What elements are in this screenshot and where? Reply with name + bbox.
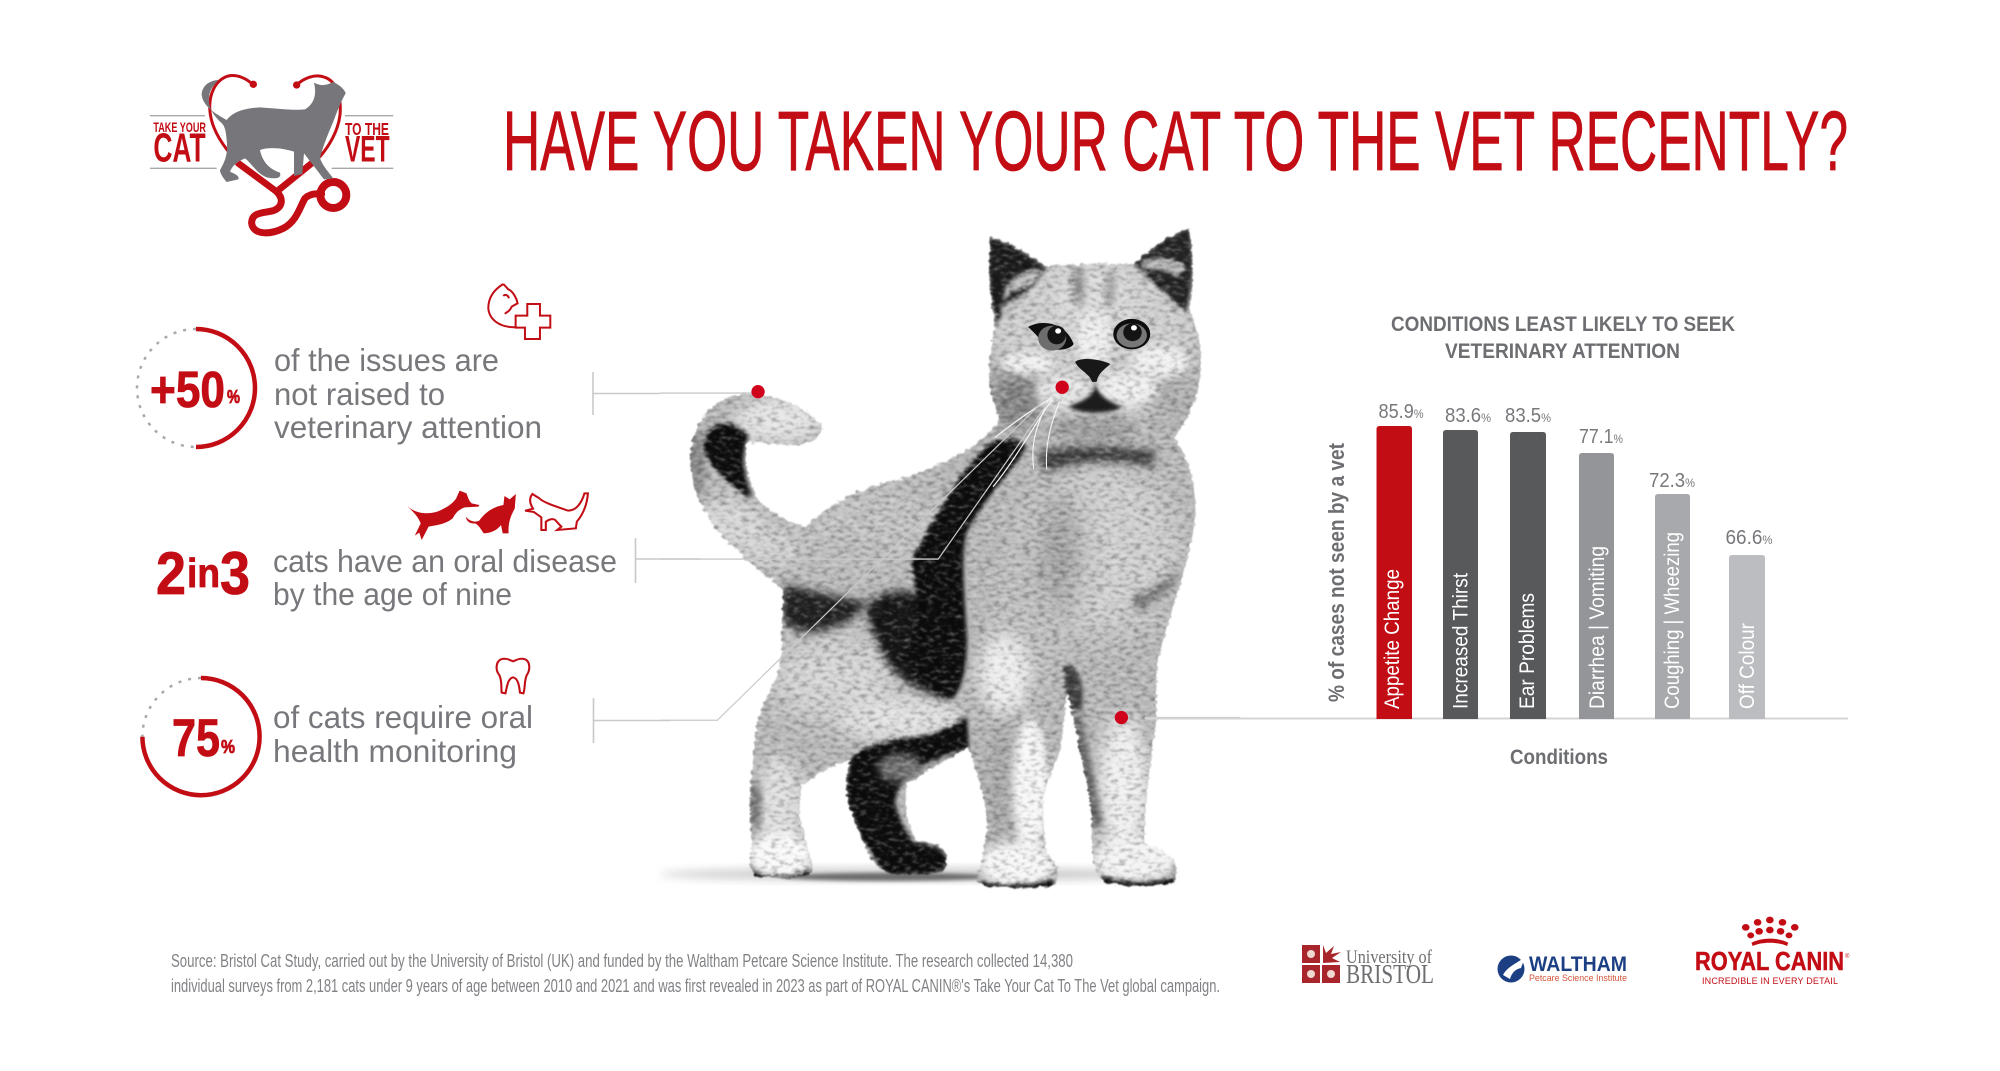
- text: oral disease: by the age of nine: [273, 576, 512, 612]
- head shading: [991, 255, 1196, 442]
- Bristol wordmark: University of: [1346, 947, 1433, 968]
- number 2 in 3: 3: [220, 540, 250, 607]
- number +50%: %: [227, 387, 240, 407]
- eyes: [1028, 319, 1150, 351]
- bar values: 83.6%: [1445, 405, 1491, 427]
- logo wordmark right: [345, 119, 390, 170]
- cat photo: [660, 210, 1240, 910]
- bar values: 83.5%: [1505, 405, 1551, 427]
- source note: Source: Bristol Cat Study, carried out by the University of Bristol (UK) and funded by the Waltham Petcare Science Institute. The research collected 14,380: [171, 950, 1073, 971]
- logo wordmark right: VET: [345, 128, 390, 170]
- Royal Canin wordmark: ROYAL CANIN: [1695, 946, 1844, 976]
- source note: [171, 950, 1220, 996]
- whiskers: [993, 397, 1060, 487]
- Royal Canin wordmark: ®: [1845, 953, 1850, 960]
- baseline: [1145, 718, 1848, 720]
- tail shading: [685, 397, 823, 567]
- bar labels: Coughing | Wheezing: [1661, 532, 1684, 709]
- connector tick: [593, 372, 660, 415]
- source note: individual surveys from 2,181 cats under 9 years of age between 2010 and 2021 and was first revealed in 2023 as part of ROYAL CANIN®'s Take Your Cat To The Vet global campaign.: [171, 975, 1220, 996]
- ears: [989, 228, 1192, 322]
- bar labels: Increased Thirst: [1450, 573, 1472, 709]
- stat: 2 in 3: [156, 491, 700, 612]
- Waltham wordmark: WALTHAM: [1529, 953, 1627, 976]
- number +50%: +50: [150, 361, 225, 418]
- ground shadow: [660, 868, 1178, 881]
- back and haunch: [771, 491, 963, 740]
- connector tick: [594, 698, 670, 743]
- dark far hind leg: [846, 717, 969, 875]
- cat body: [689, 228, 1202, 890]
- dark saddle: [904, 439, 1026, 699]
- Bristol crest: [1302, 945, 1341, 983]
- logo wordmark left: TAKE YOUR: [153, 119, 206, 135]
- icon: tooth: [497, 659, 529, 693]
- legs: [749, 665, 1174, 886]
- Waltham wordmark: Petcare Science Institute: [1529, 973, 1627, 984]
- bar values: 72.3%: [1649, 470, 1695, 492]
- number 75%: 75: [172, 709, 220, 768]
- connector tick: [636, 538, 700, 583]
- progress ring 75%: [142, 678, 260, 795]
- bars: [1376, 426, 1765, 719]
- Royal Canin wordmark: [1695, 946, 1850, 986]
- logo wordmark right: TO THE: [345, 119, 389, 139]
- icon: cat head and plus: [488, 284, 550, 339]
- bar labels: Appetite Change: [1381, 569, 1404, 709]
- bar values: 66.6%: [1726, 527, 1773, 549]
- progress ring 50%: [137, 329, 255, 447]
- bar values: 85.9%: [1378, 401, 1424, 423]
- logo cat silhouette: [202, 80, 346, 182]
- text: issues: not raised to: [274, 376, 445, 412]
- Waltham icon: [1498, 956, 1525, 982]
- Royal Canin crown: [1742, 917, 1799, 946]
- logo: Waltham: [1498, 953, 1627, 984]
- bar labels: Diarrhea | Vomiting: [1586, 546, 1609, 709]
- Bristol wordmark: [1346, 947, 1434, 989]
- logo wordmark left: CAT: [153, 125, 206, 171]
- number 2 in 3: [156, 540, 250, 607]
- bar labels: Off Colour: [1736, 623, 1759, 709]
- text: issues: [274, 342, 542, 445]
- stat: 75%: [142, 659, 670, 795]
- number 2 in 3: in: [187, 550, 220, 596]
- logo: University of Bristol: [1302, 945, 1434, 989]
- chart title: [1391, 312, 1735, 363]
- bar labels: [1381, 532, 1759, 709]
- logo stethoscope tubes: [210, 76, 346, 233]
- text: issues: of the issues are: [274, 342, 499, 378]
- stat: +50%: [137, 284, 660, 447]
- text: oral monitoring: [273, 699, 533, 769]
- chart title: VETERINARY ATTENTION: [1445, 339, 1680, 363]
- paw edges: [752, 868, 1176, 893]
- text: oral disease: [273, 543, 617, 612]
- marker dots: [751, 381, 1128, 724]
- bar values: 77.1%: [1579, 426, 1623, 448]
- text: oral monitoring: of cats require oral: [273, 699, 533, 735]
- Royal Canin wordmark: INCREDIBLE IN EVERY DETAIL: [1702, 976, 1838, 986]
- chart title: CONDITIONS LEAST LIKELY TO SEEK: [1391, 312, 1735, 336]
- logo earpieces: [250, 81, 300, 89]
- chest and shoulder: [978, 446, 1178, 714]
- logo wordmark left: [153, 119, 206, 171]
- x axis title: Conditions: [1510, 745, 1608, 769]
- y axis title: % of cases not seen by a vet: [1324, 442, 1349, 702]
- logo: Royal Canin: [1695, 917, 1850, 986]
- nose and mouth: [1069, 359, 1122, 413]
- number 2 in 3: 2: [156, 540, 186, 607]
- text: oral monitoring: health monitoring: [273, 733, 517, 769]
- number 75%: %: [221, 737, 235, 757]
- connector lines over cat: [660, 393, 1240, 720]
- logo rules: [150, 116, 393, 168]
- bar chart: [1145, 312, 1848, 769]
- bar values: [1378, 401, 1773, 549]
- text: issues: veterinary attention: [274, 409, 542, 445]
- text: oral disease: cats have an oral disease: [273, 543, 617, 579]
- bar labels: Ear Problems: [1516, 593, 1539, 709]
- Bristol wordmark: BRISTOL: [1346, 959, 1434, 989]
- logo: take your cat to the vet: [150, 76, 393, 233]
- icon: three cats: [407, 491, 588, 540]
